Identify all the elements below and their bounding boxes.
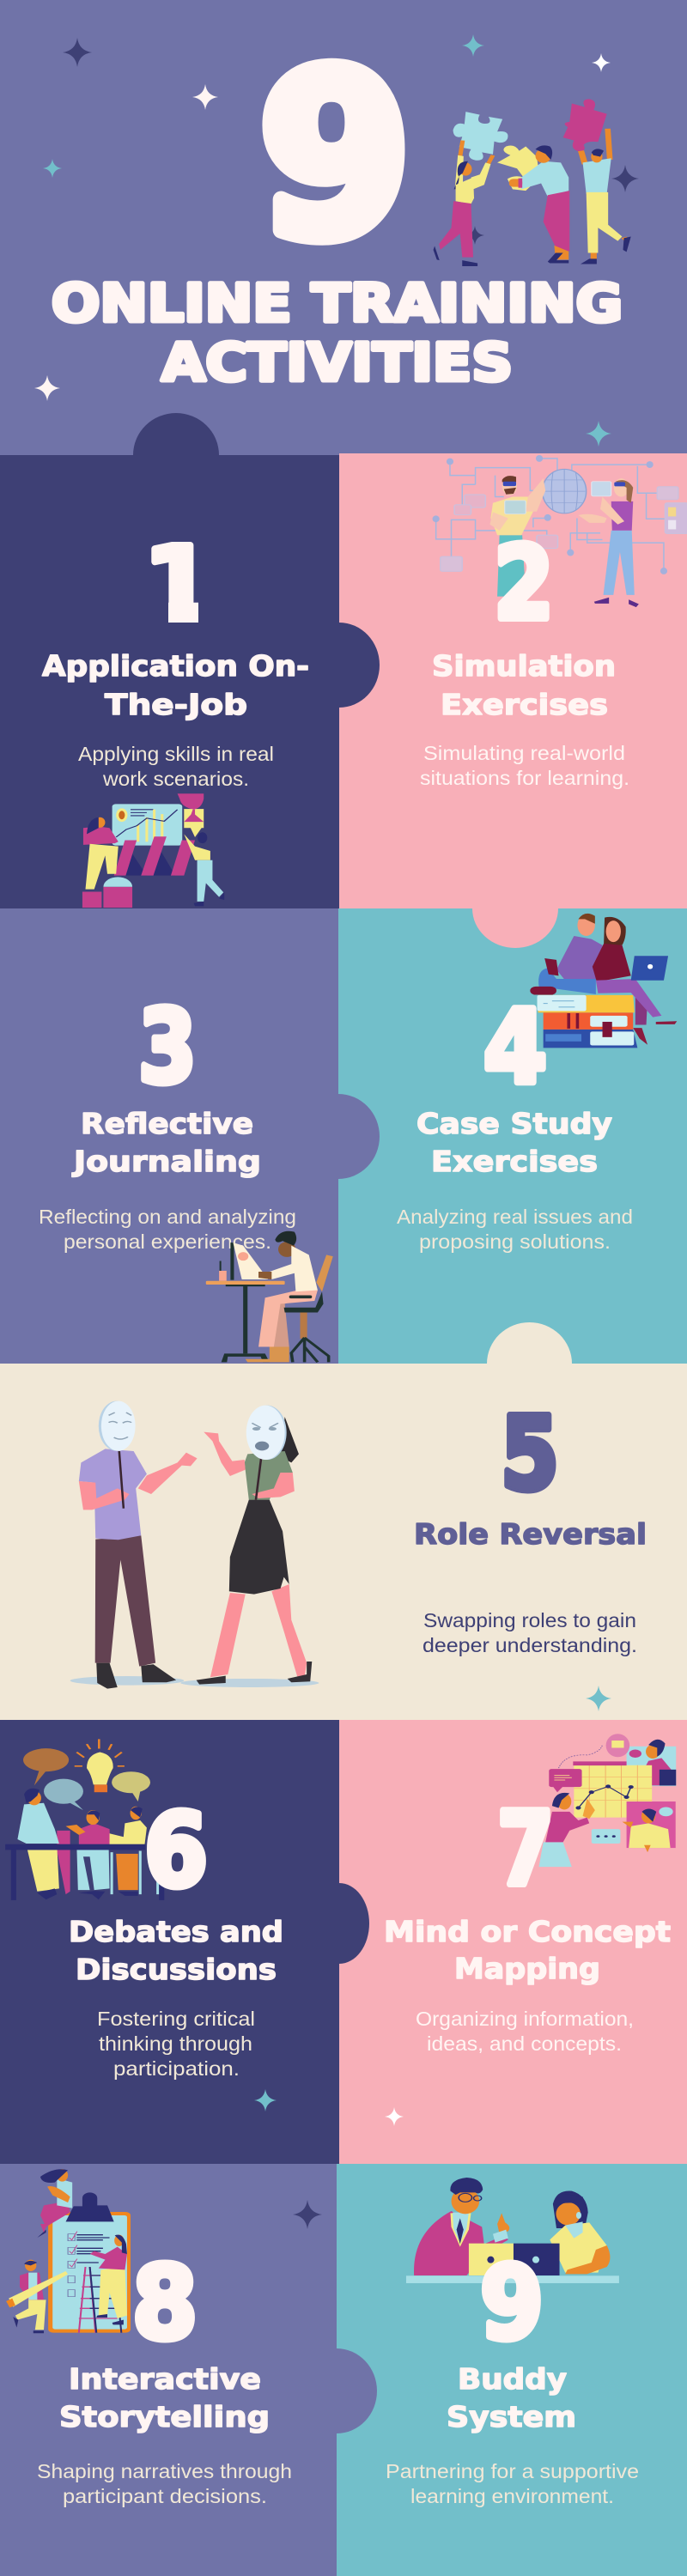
description: Swapping roles to gain (423, 1609, 636, 1631)
description (423, 1609, 637, 1656)
puzzle tab right (339, 623, 380, 708)
description (97, 2008, 255, 2080)
heading: Storytelling (59, 2400, 270, 2433)
heading: Journaling (72, 1145, 261, 1178)
description (416, 2008, 634, 2055)
heading: Buddy (458, 2362, 567, 2396)
illustration: people in virtual reality network (433, 455, 687, 607)
number 4: 4 (483, 987, 547, 1106)
heading (69, 1915, 283, 1986)
panel 2: simulation exercises (339, 453, 687, 948)
big number nine: 9 (259, 25, 410, 287)
heading: Mind or Concept (384, 1915, 671, 1948)
heading: Interactive (69, 2362, 261, 2396)
panel 8: interactive storytelling (0, 2164, 377, 2576)
illustration: two colleagues with laptops (406, 2178, 619, 2283)
heading (447, 2362, 576, 2433)
number 7: 7 (497, 1789, 554, 1908)
panel 5: role reversal (0, 1322, 687, 1720)
illustration: person at desk (206, 1231, 333, 1362)
puzzle tab (472, 908, 558, 948)
description (39, 1206, 296, 1253)
description: Analyzing real issues and (397, 1206, 633, 1228)
description: proposing solutions. (419, 1230, 611, 1253)
number 3: 3 (138, 987, 197, 1106)
heading: System (447, 2400, 576, 2433)
heading: Discussions (76, 1953, 277, 1986)
panel 6: debates and discussions (0, 1720, 369, 2164)
description: participant decisions. (63, 2485, 267, 2507)
heading: Application On- (42, 649, 309, 683)
number 5: 5 (501, 1394, 559, 1513)
heading (416, 1107, 612, 1178)
illustration: people, chart and trophy (82, 793, 224, 908)
sparkle (385, 2107, 404, 2126)
description: Partnering for a supportive (386, 2460, 639, 2482)
panel: header (0, 0, 687, 456)
heading (42, 649, 309, 721)
puzzle tab (339, 1883, 369, 1964)
title (52, 273, 623, 393)
panel 4: case study exercises (338, 908, 687, 1364)
description: situations for learning. (420, 767, 629, 789)
title: ACTIVITIES (161, 332, 513, 393)
sparkle (586, 1686, 611, 1711)
sparkle (254, 2089, 277, 2111)
description: personal experiences. (64, 1230, 271, 1253)
number 6: 6 (144, 1791, 208, 1910)
number 2: 2 (494, 524, 554, 642)
heading (59, 2362, 270, 2433)
description: ideas, and concepts. (427, 2032, 622, 2055)
heading: Mapping (454, 1952, 600, 1985)
description (397, 1206, 633, 1253)
heading: The-Job (105, 688, 247, 721)
number 9: 9 (480, 2244, 544, 2362)
number 1: 1 (143, 525, 214, 643)
panel 1: application on-the-job (0, 413, 380, 908)
description (78, 743, 274, 790)
description (386, 2460, 639, 2507)
puzzle tab (338, 1094, 380, 1179)
description: thinking through (99, 2032, 252, 2055)
sparkle (293, 2200, 322, 2229)
description: deeper understanding. (423, 1634, 637, 1656)
description (37, 2460, 292, 2507)
illustration: people with checklist clipboard (6, 2169, 131, 2333)
description: Shaping narratives through (37, 2460, 292, 2482)
description: learning environment. (410, 2485, 614, 2507)
heading: Exercises (441, 688, 608, 721)
illustration: two people on books (530, 914, 677, 1048)
panel 9: buddy system (337, 2164, 687, 2576)
heading (384, 1915, 671, 1985)
number 8: 8 (132, 2244, 198, 2362)
illustration: people holding puzzle pieces (434, 99, 631, 266)
heading: Exercises (431, 1145, 598, 1178)
puzzle tab (337, 2348, 377, 2433)
illustration: two people holding masks (70, 1401, 319, 1689)
heading (432, 649, 616, 721)
description: Organizing information, (416, 2008, 634, 2030)
description: work scenarios. (102, 768, 249, 790)
description: Reflecting on and analyzing (39, 1206, 296, 1228)
title: ONLINE TRAINING (52, 273, 623, 334)
heading: Simulation (432, 649, 616, 683)
description: participation. (113, 2057, 240, 2080)
heading: Case Study (416, 1107, 612, 1140)
description: Applying skills in real (78, 743, 274, 765)
heading: Reflective (81, 1107, 253, 1140)
illustration: people with chart (539, 1734, 676, 1867)
sparkles in header (34, 34, 639, 447)
description (420, 742, 629, 789)
panel 3: reflective journaling (0, 908, 380, 1364)
description: Fostering critical (97, 2008, 255, 2030)
puzzle tab (487, 1322, 572, 1364)
description: Simulating real-world (423, 742, 625, 764)
heading: Role Reversal (414, 1517, 647, 1551)
heading (72, 1107, 261, 1178)
puzzle tab top (133, 413, 219, 455)
heading: Debates and (69, 1915, 283, 1948)
panel 7: mind or concept mapping (339, 1720, 687, 2164)
illustration: group discussion at table (5, 1739, 164, 1900)
